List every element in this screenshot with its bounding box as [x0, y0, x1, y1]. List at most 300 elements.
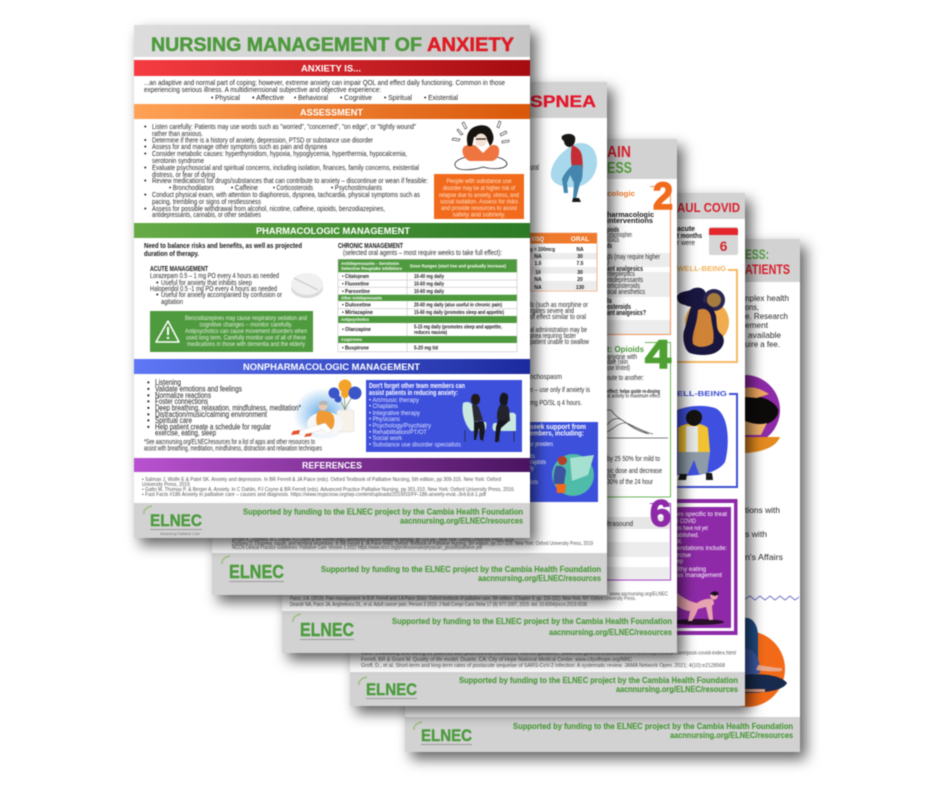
assessment list: Assess for possible withdrawal from alcohol, nicotine, caffeine, opioids, benzodiazepines, [152, 204, 385, 213]
table: opioid conversion: 7.5 [577, 261, 584, 267]
callout: team support: ists [530, 479, 538, 486]
panel: opioids: nce [607, 471, 616, 480]
footer [282, 611, 677, 653]
heading bar [134, 60, 530, 76]
header band: AUL COVID [677, 200, 740, 215]
assessment list: • [144, 149, 147, 158]
callout: substance use: and provide resources to assist [441, 205, 517, 212]
assessment list: • [144, 176, 147, 185]
panel: pharmacologic interventions: orticosteroids [607, 281, 640, 290]
footer: aacnnursing.org/ELNEC/resources [478, 573, 601, 583]
footnote: assist with breathing, meditation, mindfulness, distraction and relaxation techniques [144, 444, 322, 452]
logo: ELNEC [359, 677, 417, 699]
logo: ELNEC: ELNEC [229, 562, 284, 582]
acute management: Lorazepam 0.5 – 1 mg PO every 4 hours as needed [150, 271, 279, 280]
body text [745, 505, 783, 562]
table: chronic agents: 10-60 mg daily [414, 282, 444, 288]
panel: opioids: 30% of the 24 hour [607, 477, 653, 486]
panel: purple recommendations: rcise [677, 552, 692, 559]
callout: substance use [434, 174, 524, 219]
assessment list: • Bronchodilators [169, 183, 214, 192]
panel: opioids: dale (skin [607, 357, 628, 366]
panel: emotional well-being: WELL-BEING [677, 266, 727, 273]
sheet 4: long covid handout [350, 193, 745, 706]
intro text: r were [677, 238, 695, 247]
definition text: experiencing serious illness. A multidimensional subjective and objective experience: [144, 85, 381, 94]
nonpharmacologic list: Foster connections [155, 397, 208, 406]
chronic management: CHRONIC MANAGEMENT [338, 241, 403, 250]
callout: substance use: safety and sobriety. [452, 212, 506, 218]
title: NURSING MANAGEMENT OF [151, 34, 422, 56]
header band: SPNEA [530, 92, 596, 111]
intro [144, 241, 302, 258]
panel: opioids: anyone with [607, 352, 637, 361]
panel: pharmacologic management [134, 223, 530, 352]
footer: Supported by funding to the ELNEC project by the Cambia Health Foundation [459, 675, 738, 685]
heading bar: NONPHARMACOLOGIC MANAGEMENT [243, 362, 420, 373]
panel: pharmacologic interventions: NSAIDs [607, 235, 619, 244]
body text: al administration may be [530, 325, 587, 334]
references: Bruglio K, Dyspnea. In C Dahlin, PJ Coyne & BR Ferrell (eds). Advanced practice palliative nursing, pp 219-247. New York: Oxford University Press, 2016. [232, 537, 515, 543]
acute management [150, 264, 282, 306]
intro: Need to balance risks and benefits, as well as projected [144, 241, 302, 250]
table: opioid conversion: 130 [576, 285, 584, 291]
illustration: woman doing yoga [672, 591, 724, 625]
heading bar: PHARMACOLOGIC MANAGEMENT [256, 226, 410, 237]
assessment list: • [144, 136, 147, 144]
table: chronic agents: • Olanzapine [342, 327, 371, 333]
body text: pnea requiring faster [530, 331, 576, 340]
chronic management: (selected oral agents – most require weeks to take full effect): [343, 248, 502, 257]
panel: purple recommendations [672, 499, 738, 635]
assessment list: • [144, 142, 147, 151]
panel: assessment [134, 104, 530, 219]
table: opioid conversion: g = 100mcg [530, 247, 555, 253]
intro: duration of therapy. [144, 249, 199, 258]
assessment list: • [144, 190, 147, 199]
illustration: relaxing senior with flowers [291, 380, 362, 440]
reference list: University Press, 2019. [142, 482, 191, 488]
nonpharmacologic list: • [147, 404, 150, 412]
heading bar [134, 458, 530, 472]
acute management: Haloperidol 0.5 -1 mg PO every 4 hours as needed [150, 284, 277, 293]
callout: warning [150, 311, 313, 352]
body text: of effect similar to oral [530, 312, 586, 321]
assessment list: • [144, 204, 147, 213]
illustration: person at chart [552, 454, 594, 496]
reference list: • Salman J, Wolfe E & Patel SK. Anxiety and depression. In BR Ferrell & JA Paice (eds). Oxford Textbook of Palliative Nursing, 5th edition, pp 309-315. New York: Oxford [142, 477, 501, 483]
footer [405, 717, 800, 752]
sheet 5: patients handout [405, 239, 800, 752]
header band [282, 139, 677, 179]
panel: opioids: al activity to maximum effect [607, 394, 661, 400]
nonpharmacologic list: • [147, 378, 150, 387]
intro text: e. Research [745, 311, 788, 321]
table: chronic agents: Azapirones [341, 337, 362, 342]
panel: pharmacologic interventions: ant analgesics [607, 264, 643, 273]
panel: pharmacologic interventions: ntiepileptics [607, 269, 635, 278]
footer: Supported by funding to the ELNEC project by the Cambia Health Foundation [243, 506, 523, 516]
nonpharmacologic list: • [147, 391, 150, 400]
table: opioid conversion: 30 [577, 254, 583, 260]
footer: Supported by funding to the ELNEC project by the Cambia Health Foundation [392, 616, 672, 626]
nonpharmacologic list: exercise, eating, sleep [155, 428, 217, 438]
callout: team members: assist patients in reducing anxiety: [369, 390, 458, 397]
callout: team members [366, 380, 522, 452]
panel: purple recommendations: ns have not yet [677, 525, 708, 532]
panel: references [134, 458, 530, 498]
nonpharmacologic list: • [147, 397, 150, 406]
logo: ELNEC [222, 556, 284, 582]
assessment list: serotonin syndrome [152, 156, 204, 165]
callout: warning: Antipsychotics can cause movement disorders when [185, 328, 307, 335]
panel: pharmacologic interventions: interventions [607, 216, 653, 225]
table: chronic agents: 5-15 mg daily (promotes sleep and appetite, [414, 324, 503, 330]
panel: physical well-being: ELL-BEING [677, 391, 728, 398]
sheet 2: dyspnea handout [212, 82, 607, 595]
callout: team members: • Integrative therapy [369, 410, 420, 417]
number 4: 4 [645, 333, 672, 377]
header band: ESS: [745, 246, 769, 262]
body text: ls (such as morphine or [530, 300, 588, 309]
body text: s with [745, 529, 767, 539]
footer: Supported by funding to the ELNEC project by the Cambia Health Foundation [321, 564, 601, 574]
references: CDC. Evaluating and caring for patients with post-COVID conditions: interim guidance. www.cdc.gov/coronavirus/2019-ncov/hcp/clinical-care/post-covid-index.html [361, 650, 736, 656]
body text: mg PO/SL q 4 hours. [530, 398, 582, 407]
assessment list: Review medications for drugs/substances that can contribute to anxiety – discontinue or wean if feasible: [152, 176, 428, 185]
panel: pharmacologic interventions: ds [607, 241, 612, 250]
logo: ELNEC [144, 506, 202, 536]
callout: team members: • Chaplains [369, 403, 399, 410]
callout: team members: • Substance use disorder specialists [369, 442, 462, 448]
assessment list [144, 122, 428, 219]
table: chronic agents: • Buspirone [342, 346, 369, 352]
table: opioid conversion: V/SQ [531, 236, 544, 243]
body text [530, 300, 590, 407]
assessment list: • Corticosteroids [273, 183, 313, 192]
panel: emotional well-being [677, 266, 737, 362]
assessment list: Determine if there is a history of anxiety, depression, PTSD or substance use disorder [152, 136, 373, 144]
nonpharmacologic list: Deep breathing, relaxation, mindfulness, meditation* [155, 404, 301, 412]
reference list: • Gatto M, Thomas P, & Berger A. Anxiety. In C Dahlin, PJ Coyne & BR Ferrell (eds). Advanced Practice Palliative Nursing, pp 301-310. New York: Oxford University Press, 2016. [142, 487, 515, 493]
logo: ELNEC [293, 614, 354, 640]
intro text: ons, [745, 302, 759, 312]
sheet 1: nursing management of anxiety [134, 25, 530, 538]
panel: pharmacologic interventions: harmacologic [607, 210, 654, 219]
heading bar: ANXIETY IS... [301, 64, 361, 74]
body text: n's Affairs [745, 552, 783, 562]
illustration: woman meditating on orange circle [709, 618, 787, 707]
nonpharmacologic list: • [147, 410, 150, 419]
definition text: • Behavioral [294, 93, 328, 102]
table: chronic agents: Selective Reuptake Inhibitors [341, 266, 402, 271]
panel: purple recommendations: Ithy eating [677, 566, 707, 573]
body text: rgates severe and [530, 306, 574, 315]
panel: opioids: oute to another: [607, 373, 644, 382]
nonpharmacologic list: Help patient create a schedule for regular [155, 422, 271, 432]
heading bar: REFERENCES [302, 460, 362, 472]
chart: opioid effect curves [607, 410, 668, 438]
callout: team support: embers, including: [530, 430, 584, 438]
panel: pharmacologic interventions: ) [607, 257, 609, 266]
references [361, 650, 736, 669]
body text: nchospasm [530, 372, 562, 381]
table: chronic agents: Antidepressants - Serotonin [341, 261, 399, 266]
panel: purple recommendations: I COVID [677, 518, 696, 525]
panel: purple recommendations: ss management [677, 572, 722, 579]
table: chronic agents: • Paroxetine [342, 289, 370, 295]
acute management: • [156, 278, 159, 287]
panel: anxiety is [134, 60, 530, 102]
panel: nonpharmacologic management [134, 359, 530, 452]
panel: pharmacologic interventions: ls [607, 296, 612, 305]
intro text: acute [677, 224, 695, 233]
nonpharmacologic list: Normalize reactions [155, 391, 211, 400]
header band: AIN [607, 144, 631, 161]
table: opioid conversion: NA [534, 285, 542, 291]
table: chronic agents: • Citalopram [342, 274, 370, 280]
callout: warning: Benzodiazepines may cause respiratory sedation and [185, 315, 307, 322]
definition text: • Cognitive [340, 93, 372, 102]
title band [134, 25, 530, 57]
references: Paice, J.A. (2019). Pain management. In B.R. Ferrell and J.A Paice (Eds). Oxford textbook of palliative care, 5th edition. (Chapter 9, pp. 116-131). New York, NY: Oxford University Press. [290, 596, 636, 602]
panel: purple row table: ltrasound [607, 519, 633, 528]
assessment list: Listen carefully: Patients may use words such as "worried", "concerned", "on edge", or "tightly wound" [152, 122, 416, 131]
assessment list: • [144, 163, 147, 172]
references: Deandr NA, Paice JA, Anghelescu DL, et al. Adult cancer pain. Person 3 2019. J Natl Compr Canc Netw 17 (8) 977-1007, 2019. doi: 10.6004/jnccn.2019.0038 [290, 602, 587, 608]
nonpharmacologic list: Distraction/music/calming environment [155, 410, 268, 419]
illustration: woman with storm cloud [677, 288, 729, 355]
footer: aacnnursing.org/ELNEC/resources [400, 516, 523, 526]
table: chronic agents: reduces nausea) [414, 330, 447, 336]
acute management: • [156, 290, 159, 299]
table: opioid conversion: 10 [535, 270, 541, 276]
callout: team members: • Psychology/Psychiatry [369, 422, 432, 430]
header band [405, 239, 800, 282]
assessment list: • Psychostimulants [331, 183, 382, 192]
footer [134, 503, 530, 538]
header band [350, 193, 745, 219]
table: opioid conversion: ORAL [571, 236, 589, 243]
table: chronic agents [338, 259, 517, 352]
sheet 3: pain handout [282, 139, 677, 653]
illustration: man short of breath [551, 134, 597, 202]
number 6: 6 [650, 493, 671, 534]
icon: calendar with 6 [709, 227, 738, 255]
panel: pharmacologic interventions: ocal anesthetics [607, 287, 645, 296]
logo: ELNEC: Advancing Palliative Care [160, 532, 200, 536]
definition text [144, 78, 505, 102]
table: opioid conversion: 1.5 [535, 261, 542, 267]
icon: calendar with 6: 6 [720, 238, 728, 254]
callout: substance use: relapse due to anxiety, stress, and [439, 192, 519, 199]
footer [350, 672, 745, 706]
nonpharmacologic list: • [147, 422, 150, 432]
table: chronic agents: 20-60 mg daily (also useful in chronic pain) [414, 302, 502, 308]
table: opioid conversion: 30 [577, 270, 583, 276]
heading bar [134, 104, 530, 119]
body text: patient unable to swallow [530, 337, 590, 346]
callout: substance use: social isolation. Assess for risks [440, 198, 518, 206]
number 2: 2 [653, 176, 673, 218]
header band [212, 82, 607, 118]
table: chronic agents: 5-20 mg tid [414, 346, 438, 352]
heading bar [134, 223, 530, 238]
panel: purple recommendations: es specific to treat [677, 511, 727, 518]
table: chronic agents: • Mirtazapine [342, 310, 373, 316]
panel: pharmacologic interventions [607, 176, 673, 334]
panel: physical well-being [677, 391, 737, 487]
panel: purple recommendations: ablished. [677, 532, 699, 539]
table: chronic agents: 15-60 mg daily (promotes sleep and appetite) [414, 310, 504, 316]
intro text: ement [745, 320, 769, 330]
panel: pharmacologic interventions: cetaminophen [607, 230, 632, 239]
nonpharmacologic list: • [147, 384, 150, 394]
references: Ferrell, BR & Grant M. Quality of life model. Duarte, CA: City of Hope National Medical Center. www.cityofhope.org/NRC [361, 657, 632, 663]
definition text: • Affective [252, 93, 284, 102]
nonpharmacologic list: • [147, 416, 150, 425]
table: chronic agents: 10-60 mg daily [414, 289, 444, 295]
panel: opioids: use limited) [607, 363, 630, 372]
panel: pharmacologic interventions: osteroids [607, 302, 631, 311]
panel: opioids: effect: helps guide re-dosing [607, 389, 660, 395]
logo: ELNEC: ELNEC [300, 620, 354, 640]
acute management: agitation [161, 297, 183, 306]
callout: team members: • Art/music therapy [369, 397, 420, 404]
panel: purple recommendations: al, [677, 538, 682, 545]
intro text [745, 293, 789, 349]
panel: pharmacologic interventions: ds (may require higher [607, 252, 660, 261]
reference list [142, 477, 515, 498]
intro text [677, 224, 702, 247]
definition text: ...an adaptive and normal part of coping; however, extreme anxiety can impair QOL and effect daily functioning. Common in those [144, 78, 505, 87]
definition text: • Spiritual [384, 93, 412, 102]
footer: aacnnursing.org/ELNEC/resources [549, 627, 672, 637]
table: chronic agents: • Fluoxetine [342, 282, 369, 288]
assessment list: • [144, 122, 147, 131]
panel: purple recommendations: ep [677, 558, 683, 565]
table: chronic agents: Other Antidepressants [341, 296, 382, 300]
callout: warning: cognitive changes – monitor carefully. [200, 322, 293, 328]
table: opioid conversion: NA [534, 254, 542, 260]
callout: warning: medications in those with dementia and the elderly [187, 341, 306, 348]
illustration: anxious woman [452, 121, 509, 170]
callout: team support: rapists [530, 459, 546, 466]
callout: team members: • Rehabilitation/PT/OT [369, 429, 427, 436]
references [232, 537, 593, 551]
footnote [144, 437, 322, 452]
illustration: woman on purple circle [710, 375, 780, 453]
intro text: t months [677, 231, 702, 240]
illustration: two people in conversation [462, 393, 516, 442]
header band: ATIENTS [745, 261, 790, 277]
body text: tions with [745, 505, 780, 515]
panel: pharmacologic interventions: ant analgesics? [607, 308, 646, 317]
icon: pill [291, 273, 323, 298]
nonpharmacologic list: Spiritual care [155, 416, 192, 425]
callout: team members: • Social work [369, 435, 402, 442]
intro text: nplex health [745, 293, 789, 303]
assessment list: • Caffeine [231, 183, 258, 192]
references: www.aacnursing.org/ELNEC [609, 592, 668, 598]
callout: team members: • Physicians [369, 416, 400, 423]
panel: opioids: sic dose and decrease [607, 466, 662, 475]
panel: pharmacologic interventions: ntidepressants [607, 275, 643, 284]
table: chronic agents: Dose Ranges (start low and gradually increase) [410, 264, 506, 268]
footer: aacnnursing.org/ELNEC/resources [616, 684, 738, 694]
callout: team members: Don't forget other team members can [369, 383, 465, 390]
chronic management [338, 241, 502, 257]
callout: team support: ly [530, 465, 535, 472]
table: opioid conversion: NA [576, 247, 584, 253]
heading bar [134, 359, 530, 374]
callout: team support: ts [530, 453, 535, 460]
footer: Supported by funding to the ELNEC project by the Cambia Health Foundation [513, 721, 793, 731]
logo: ELNEC [414, 722, 472, 745]
logo: ELNEC: ELNEC [366, 680, 417, 699]
panel: purple recommendations: endations include: [677, 545, 727, 552]
assessment list: antidepressants, cannabis, or other sedatives [152, 210, 261, 219]
callout: team support [530, 422, 598, 502]
table: chronic agents: • Duloxetine [342, 302, 371, 308]
logo: ELNEC: ELNEC [150, 511, 202, 530]
panel: pharmacologic interventions: pioids [607, 225, 619, 234]
table: chronic agents: Antipsychotics [341, 317, 369, 322]
callout: warning: used long term. Carefully monitor use of all of these [186, 334, 306, 342]
footnote: *See aacnnursing.org/ELNEC/resources for a list of apps and other resources to [144, 437, 315, 446]
heading bar: ASSESSMENT [300, 108, 363, 118]
footer: aacnnursing.org/ELNEC/resources [670, 730, 793, 740]
footer [212, 553, 607, 595]
callout: substance use: People with substance use [446, 178, 512, 185]
text fragment: ural [530, 162, 539, 172]
icon: warning triangle [156, 321, 179, 342]
assessment list: pacing, trembling or signs of restlessness [152, 197, 261, 206]
references: Dorsney D. Dyspnea, cough, and terminal secretions. In BR Ferrell & JA Paice (eds). Oxford Textbook of Palliative Nursing, 5th edition, pp 217-229. New York: Oxford University Press, 2019 [232, 541, 593, 547]
assessment list: Assess for and manage other symptoms such as pain and dyspnea [152, 142, 328, 151]
acute management: Useful for anxiety accompanied by confusion or [161, 290, 282, 299]
panel: opioids: t: Opioids [607, 345, 645, 354]
table: opioid conversion [530, 233, 597, 291]
acute management: Useful for anxiety that inhibits sleep [161, 278, 252, 287]
nonpharmacologic list: Validate emotions and feelings [155, 384, 242, 394]
panel: purple row table [607, 493, 671, 580]
nonpharmacologic list [147, 378, 301, 438]
acute management: ACUTE MANAGEMENT [150, 264, 208, 273]
intro text: uire a fee. [745, 339, 780, 349]
illustration: seated person in yellow [677, 406, 728, 480]
reference list: • Fast Facts #186 Anxiety in palliative care – causes and diagnosis. https://www.mypcnow.org/wp-content/uploads/2019/03/FF-186-anxiety-eval.-3rd-Ed-1.pdf [142, 492, 486, 498]
table: opioid conversion: NA [534, 277, 542, 283]
definition text: • Existential [424, 93, 458, 102]
references [290, 592, 668, 608]
panel: opioids [607, 333, 672, 497]
assessment list: Conduct physical exam, with attention to diaphoresis, dyspnea, tachcardia, physical symptoms such as [152, 190, 420, 199]
panel: opioids: by 25 50% for mild to [607, 454, 660, 463]
body text: n – use only if anxiety is [530, 385, 590, 394]
callout: team support: ur providers [530, 441, 553, 448]
assessment list: Consider metabolic causes: hyperthyroidism, hypoxia, hypoglycemia, hyperthermia, hypocalcemia, [152, 149, 407, 158]
intro text: available [748, 330, 781, 340]
nonpharmacologic list: Listening [155, 378, 181, 387]
references: Groff, D., et al. Short-term and long-term rates of postacute sequelae of SARS-CoV-2 infection: A systematic review. JAMA Network Open. 2021; 4(10):e2128568 [361, 663, 725, 669]
panel: pharmacologic interventions: cologic [607, 189, 635, 198]
callout: substance use: disorder may be at higher risk of [443, 185, 515, 192]
callout: team support: seek support from [530, 424, 586, 431]
table: opioid conversion: 20 [577, 277, 583, 283]
definition text: • Physical [211, 93, 240, 102]
references: NCCN Clinical Practice Guidelines: Palliative Care Version 2.2022 https://www.nccn.org/professionals/physician_gls/pdf/palliative.pdf [232, 545, 482, 551]
